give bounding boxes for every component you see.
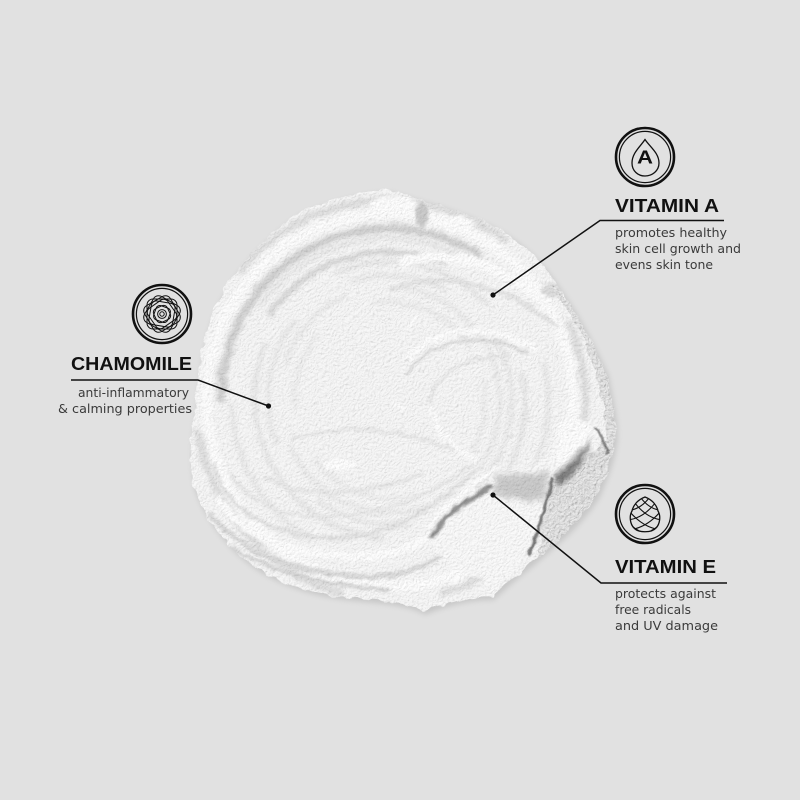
text: vitamin E description <box>615 587 718 633</box>
text: vitamin A description: evens skin tone <box>615 258 713 272</box>
icon: pine cone <box>616 485 674 543</box>
text: vitamin A description: promotes healthy <box>615 226 727 240</box>
leader line: vitamin A <box>490 220 724 298</box>
callout: vitamin A <box>490 128 741 298</box>
text: vitamin A description: skin cell growth and <box>615 242 741 256</box>
heading: vitamin A: VITAMIN A <box>615 196 719 216</box>
icon: droplet with A: A <box>637 148 653 168</box>
callout: chamomile <box>58 285 271 416</box>
leader line: vitamin E <box>490 492 727 583</box>
callout: vitamin E <box>490 485 727 633</box>
icon: droplet with A <box>616 128 674 186</box>
text: vitamin A description <box>615 226 741 272</box>
upper right sweep <box>400 257 547 303</box>
text: chamomile description: & calming properties <box>58 402 192 416</box>
lower sweep <box>213 463 477 538</box>
swirl arcs <box>194 195 592 598</box>
text: chamomile description <box>58 386 192 416</box>
cream swatch <box>190 188 619 615</box>
text: vitamin E description: free radicals <box>615 603 691 617</box>
icon: chamomile flower <box>133 285 191 343</box>
inner swirl <box>452 327 484 334</box>
leader line: chamomile <box>71 380 271 409</box>
text: vitamin E description: and UV damage <box>615 619 718 633</box>
heading: vitamin E: VITAMIN E <box>615 557 716 577</box>
text: chamomile description: anti-inflammatory <box>78 386 189 400</box>
smear fold <box>438 419 590 580</box>
text: vitamin E description: protects against <box>615 587 716 601</box>
texture <box>183 173 630 620</box>
heading: chamomile: CHAMOMILE <box>71 354 192 374</box>
